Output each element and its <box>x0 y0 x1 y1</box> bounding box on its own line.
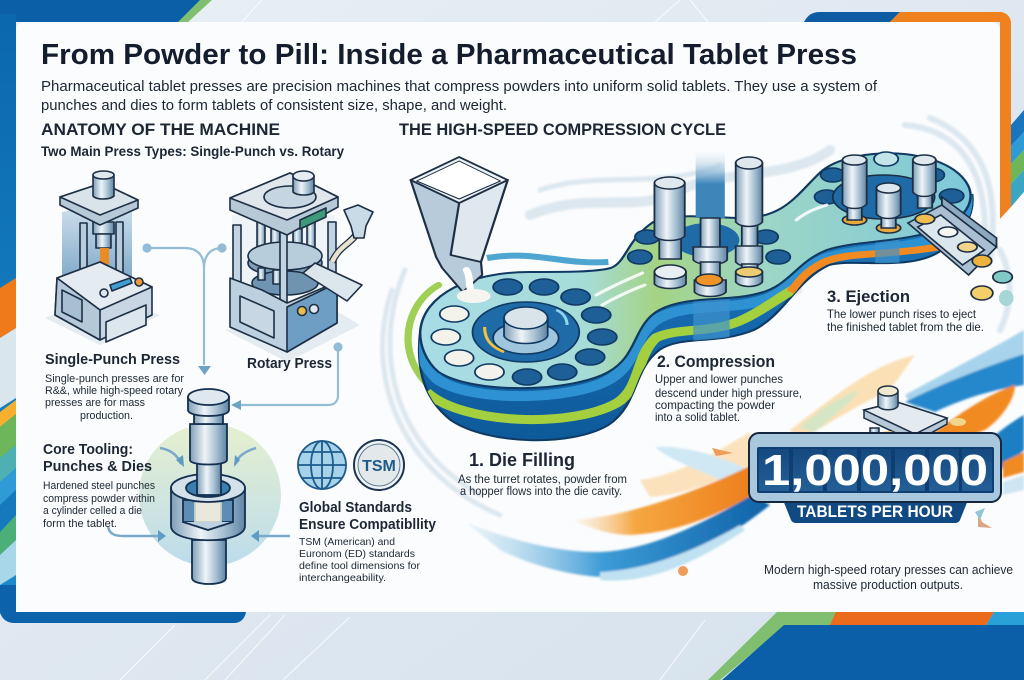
ejection punches <box>833 155 936 233</box>
text: core tooling <box>43 441 155 530</box>
icon: globe <box>298 441 346 489</box>
ejection chute <box>908 197 996 275</box>
step 2 text: into a solid tablet. <box>655 410 740 424</box>
frame: bottom right band <box>708 612 1024 680</box>
background light streaks <box>120 0 708 680</box>
text: global standards: Ensure Compatibllity <box>299 517 436 533</box>
production note: Modern high-speed rotary presses can achieve <box>764 563 1013 577</box>
text: core tooling: Core Tooling: <box>43 441 133 458</box>
step 2 text: descend under high pressure, <box>655 386 802 400</box>
step 3 text: 3. Ejection <box>827 287 910 306</box>
production note: massive production outputs. <box>813 578 963 592</box>
text: single-punch press: presses are for mass <box>45 397 145 409</box>
compression punches <box>654 150 762 296</box>
heading: anatomy: ANATOMY OF THE MACHINE <box>41 121 280 139</box>
frame: top right band <box>804 12 1011 219</box>
blue stream behind hopper <box>487 256 608 262</box>
icon: punch and die tooling <box>108 389 290 584</box>
text: global standards: Euronom (ED) standards <box>299 548 415 560</box>
step 1 text: 1. Die Filling <box>469 450 575 470</box>
swoosh: right wave <box>790 330 1024 495</box>
decorative specks <box>678 448 992 576</box>
icon: small press on counter <box>845 386 966 453</box>
text: global standards <box>299 500 436 584</box>
frame: left strip <box>0 14 16 614</box>
intro text: Pharmaceutical tablet presses are precision machines that compress powders into uniform solid tablets. They use a system of <box>41 79 878 95</box>
text: rotary press: Rotary Press <box>247 355 332 372</box>
heading: compression cycle: THE HIGH-SPEED COMPRESSION CYCLE <box>399 121 726 139</box>
frame: top left band <box>0 0 212 22</box>
icon: TSM badge: TSM <box>362 458 396 475</box>
step 3 text: the finished tablet from the die. <box>827 320 984 334</box>
compression turret <box>408 150 1013 440</box>
hopper <box>411 157 508 303</box>
text: single-punch press: Single-punch presses are for <box>45 373 184 385</box>
icon: rotary press <box>225 171 373 362</box>
turret side wall <box>418 194 974 442</box>
text: single-punch press: production. <box>80 410 133 422</box>
production note <box>764 563 1013 592</box>
compression hub <box>674 223 739 257</box>
step 3 text <box>827 287 984 334</box>
swoosh: lower left wave <box>467 432 770 581</box>
flow arrows <box>596 205 827 305</box>
text: core tooling: Hardened steel punches <box>43 480 155 492</box>
die holes <box>493 152 964 385</box>
text: core tooling: compress powder within <box>43 493 155 505</box>
step 1 text: As the turret rotates, powder from <box>458 474 627 486</box>
intro text: punches and dies to form tablets of consistent size, shape, and weight. <box>41 98 507 114</box>
frame: bottom left band <box>0 585 246 623</box>
text: core tooling: a cylinder celled a die <box>43 505 142 517</box>
icon: TSM badge <box>354 440 404 490</box>
counter value: 1,000,000 <box>762 446 988 495</box>
step 1 text <box>458 450 627 498</box>
title: From Powder to Pill: Inside a Pharmaceutical Tablet Press <box>41 39 857 71</box>
powder filled dies <box>431 306 504 380</box>
text: global standards: TSM (American) and <box>299 536 395 548</box>
step 2 text: compacting the powder <box>655 398 775 412</box>
text: single-punch press <box>45 351 184 422</box>
icon: single-punch press <box>45 171 160 345</box>
production counter <box>749 433 1001 523</box>
ejected tablets <box>971 271 1013 306</box>
turret deck surface <box>420 153 971 388</box>
text: global standards: interchangeability. <box>299 572 386 584</box>
text: global standards: define tool dimensions for <box>299 560 421 572</box>
background flow swirls <box>383 118 1009 515</box>
green flow behind turret <box>408 285 608 422</box>
text: single-punch press: Single-Punch Press <box>45 351 180 368</box>
step 3 text: The lower punch rises to eject <box>827 307 977 321</box>
step 1 text: a hopper flows into the die cavity. <box>460 486 622 498</box>
step 2 text <box>655 352 802 424</box>
turret hub <box>472 302 579 362</box>
step 2 text: Upper and lower punches <box>655 372 783 386</box>
text: core tooling: form the tablet. <box>43 518 117 530</box>
text: single-punch press: R&&, while high-speed rotary <box>45 385 183 397</box>
connector: press types to tooling <box>144 244 342 410</box>
subheading: press types: Two Main Press Types: Single-Punch vs. Rotary <box>41 143 344 159</box>
text: global standards: Global Standards <box>299 500 412 516</box>
frame: right stripes <box>1011 110 1024 207</box>
intro text <box>41 79 878 114</box>
counter label: TABLETS PER HOUR <box>797 502 953 521</box>
text: core tooling: Punches & Dies <box>43 458 152 475</box>
step 2 text: 2. Compression <box>657 352 775 371</box>
